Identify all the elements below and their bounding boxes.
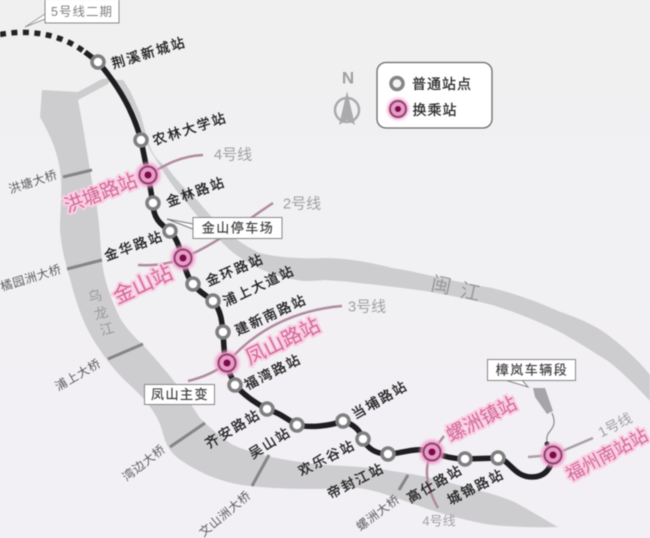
dashed extension bbox=[0, 32, 86, 53]
river: Min River bbox=[108, 80, 650, 401]
bridge labels bbox=[0, 167, 402, 538]
callout: Line 5 phase 2: 5号线二期 bbox=[51, 5, 113, 19]
station labels: 高仕路站 bbox=[404, 461, 466, 506]
north compass: N bbox=[342, 68, 354, 88]
transfer line labels: 2号线 bbox=[283, 196, 321, 212]
interchange station labels: 金山站 bbox=[110, 261, 176, 309]
interchange station labels: 洪塘路站 bbox=[61, 170, 140, 217]
interchange station: Hongtang Road bbox=[136, 163, 160, 187]
callout: Jinshan parking depot: 金山停车场 bbox=[202, 220, 274, 236]
callout: Line 5 phase 2 bbox=[25, 0, 119, 27]
legend bbox=[377, 62, 492, 128]
river name: Min River bbox=[429, 272, 482, 306]
station labels: 齐安路站 bbox=[203, 407, 263, 451]
callout: Zhanglan vehicle depot bbox=[488, 360, 576, 387]
bridge labels: 湾边大桥 bbox=[119, 441, 168, 484]
depot spur: Zhanglan bbox=[533, 388, 554, 446]
solid route bbox=[85, 52, 553, 477]
interchange lines bbox=[138, 155, 593, 508]
station labels: 欢乐谷站 bbox=[296, 437, 358, 479]
station labels: 浦上大道站 bbox=[221, 263, 297, 309]
river name: Min River: 江 bbox=[458, 279, 482, 306]
bridge labels: 洪塘大桥 bbox=[7, 167, 59, 196]
station labels: 金林路站 bbox=[164, 174, 228, 210]
station labels: 城锦路站 bbox=[445, 466, 507, 508]
interchange station labels: 螺洲镇站 bbox=[443, 392, 521, 447]
river: Wulong River bbox=[40, 78, 558, 527]
station labels: 金华路站 bbox=[102, 228, 166, 264]
station labels bbox=[102, 34, 507, 508]
transfer line labels: 1号线 bbox=[595, 410, 635, 440]
callout: Fengshan substation bbox=[144, 384, 214, 404]
river name: Wulong River: 江 bbox=[98, 319, 116, 339]
bridge labels: 螺洲大桥 bbox=[354, 492, 402, 534]
station labels: 荆溪新城站 bbox=[110, 34, 188, 72]
station labels: 当埔路站 bbox=[349, 378, 411, 422]
interchange station: Luozhou Town bbox=[420, 440, 444, 464]
river name: Wulong River bbox=[86, 286, 116, 339]
transfer line labels: 3号线 bbox=[348, 298, 386, 316]
station labels: 福湾路站 bbox=[242, 350, 304, 393]
station labels: 金环路站 bbox=[204, 251, 266, 289]
interchange station: Fuzhou South bbox=[541, 443, 565, 467]
callout: Fengshan substation: 凤山主变 bbox=[151, 387, 209, 402]
station labels: 建新南路站 bbox=[233, 292, 309, 338]
interchange station labels bbox=[61, 170, 650, 485]
river name: Wulong River: 龙 bbox=[92, 303, 110, 323]
metro line 1 bbox=[0, 32, 553, 477]
transfer line labels: 4号线 bbox=[422, 514, 456, 528]
interchange station labels: 福州南站站 bbox=[563, 425, 650, 485]
transfer line labels bbox=[214, 146, 635, 528]
interchange station labels: 凤山路站 bbox=[242, 314, 324, 369]
river name: Wulong River: 乌 bbox=[86, 286, 104, 306]
north compass bbox=[335, 68, 359, 125]
station labels: 帝封江站 bbox=[325, 460, 387, 502]
river name: Min River: 闽 bbox=[429, 272, 453, 299]
interchange station: Jinshan bbox=[171, 246, 195, 270]
legend: interchange station: 换乘站 bbox=[412, 102, 458, 118]
bridge labels: 浦上大桥 bbox=[53, 356, 103, 394]
interchange station: Fengshan Road bbox=[215, 351, 239, 375]
station labels: 吴山站 bbox=[246, 424, 294, 462]
station labels: 农林大学站 bbox=[151, 110, 229, 148]
callout: Jinshan parking depot bbox=[167, 218, 282, 238]
callout: Zhanglan vehicle depot: 樟岚车辆段 bbox=[496, 362, 568, 378]
bridge labels: 橘园洲大桥 bbox=[0, 261, 63, 294]
bridges bbox=[63, 170, 408, 490]
regular stations bbox=[92, 56, 504, 465]
transfer line labels: 4号线 bbox=[214, 146, 252, 164]
legend: regular station: 普通站点 bbox=[412, 76, 472, 92]
